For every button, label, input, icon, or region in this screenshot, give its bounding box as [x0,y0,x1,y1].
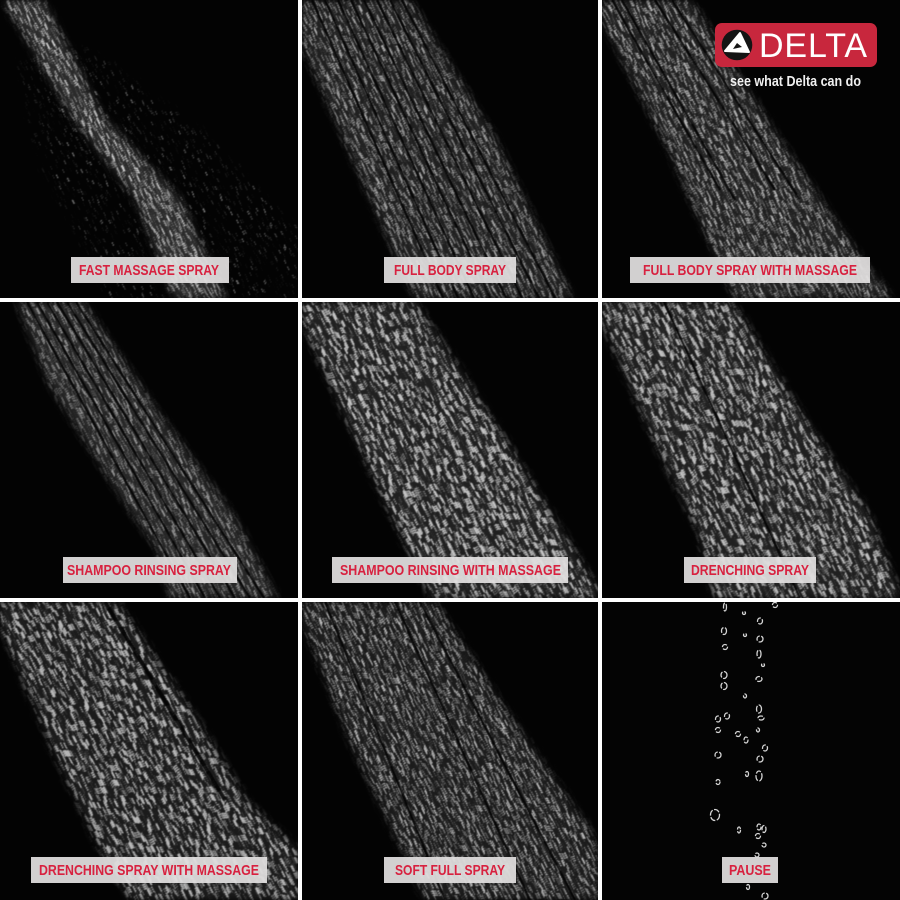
panel: drenching spray [602,302,900,598]
label: shampoo rinsing with massage [332,557,568,583]
panel: pause [602,602,900,900]
label: drenching spray [684,557,816,583]
logo: Delta [715,23,877,90]
label: pause [722,857,778,883]
label: fast massage spray [71,257,229,283]
panel: shampoo rinsing with massage [302,302,598,598]
label: shampoo rinsing spray: SHAMPOO RINSING SPRAY [67,562,231,579]
label: drenching spray with massage: DRENCHING SPRAY WITH MASSAGE [39,862,259,879]
label: soft full spray: SOFT FULL SPRAY [395,862,505,879]
label: full body spray [384,257,516,283]
label: soft full spray [384,857,516,883]
water drips [710,602,778,899]
label: full body spray: FULL BODY SPRAY [394,262,506,279]
label: full body spray with massage: FULL BODY SPRAY WITH MASSAGE [643,262,857,279]
label: fast massage spray: FAST MASSAGE SPRAY [79,262,219,279]
panel: fast massage spray [0,0,298,298]
label: full body spray with massage [630,257,870,283]
panel: soft full spray [302,602,598,900]
logo: Delta: DELTA [759,27,867,65]
label: shampoo rinsing with massage: SHAMPOO RINSING WITH MASSAGE [340,562,561,579]
label: pause: PAUSE [729,862,771,879]
label: shampoo rinsing spray [63,557,237,583]
panel: drenching spray with massage [0,602,298,900]
logo: Delta: see what Delta can do [730,74,861,90]
label: drenching spray: DRENCHING SPRAY [691,562,809,579]
panel: full body spray with massage [602,0,900,298]
panel: shampoo rinsing spray [0,302,298,598]
icon: Delta triangle mark [722,30,752,60]
label: drenching spray with massage [31,857,267,883]
panel: full body spray [302,0,598,298]
